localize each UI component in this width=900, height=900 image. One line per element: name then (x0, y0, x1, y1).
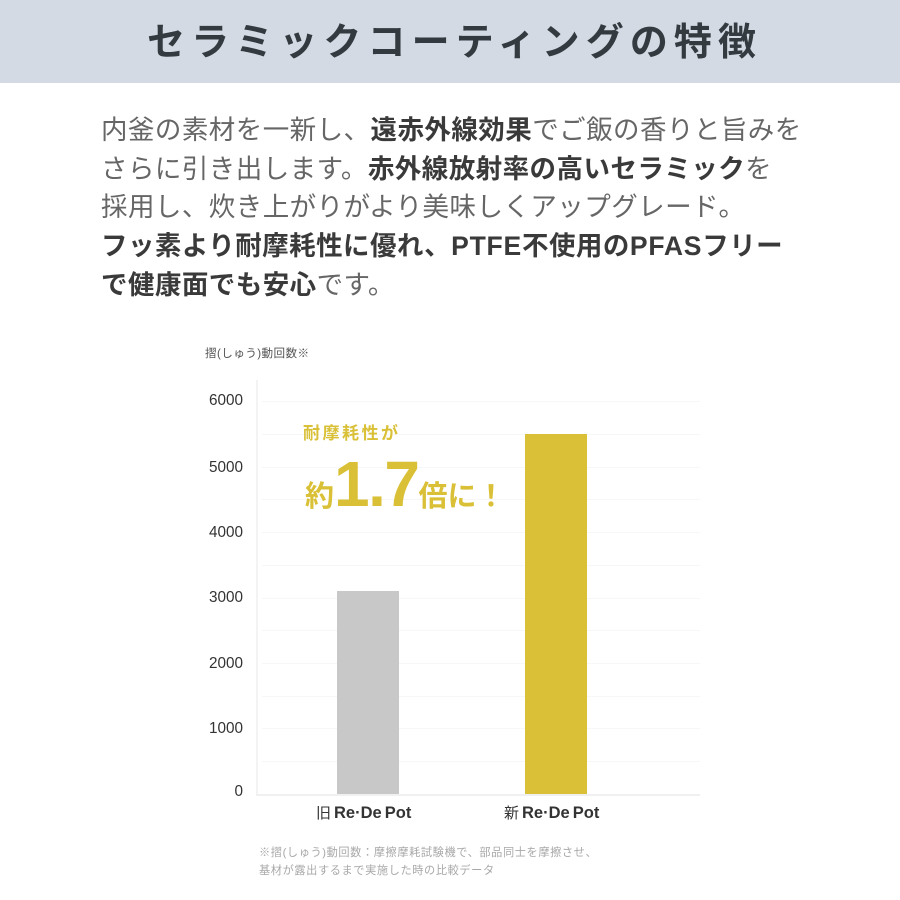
callout: durability about 1.7x (303, 424, 506, 520)
title banner (0, 0, 900, 83)
footnote: ※摺(しゅう)動回数：摩擦摩耗試験機で、部品同士を摩擦させ、 (259, 847, 597, 859)
bar: new Re・De Pot (525, 434, 587, 794)
y axis labels: 2000 (209, 655, 243, 672)
y axis labels: 3000 (209, 589, 243, 606)
footnote: 基材が露出するまで実施した時の比較データ (259, 864, 495, 876)
footnote (259, 846, 597, 876)
callout line 1: 耐摩耗性が (303, 424, 400, 443)
description text block (101, 115, 802, 300)
bar chart (209, 380, 700, 822)
axis title: 摺(しゅう)動回数※ (205, 347, 309, 360)
description text block: さらに引き出します。赤外線放射率の高いセラミックを (101, 154, 772, 184)
description text block: 採用し、炊き上がりがより美味しくアップグレード。 (101, 192, 745, 222)
y axis labels (209, 392, 243, 800)
callout line 2: 約1.7倍に！ (305, 448, 506, 520)
bar: old Re・De Pot (337, 591, 399, 794)
x label: old Re・De Pot: 旧Re·De Pot (316, 804, 411, 822)
title: セラミックコーティングの特徴 (147, 22, 762, 64)
x label: new Re・De Pot: 新Re·De Pot (504, 804, 599, 822)
y axis labels: 6000 (209, 392, 243, 409)
y axis labels: 4000 (209, 524, 243, 541)
y axis labels: 5000 (209, 459, 243, 476)
description text block: フッ素より耐摩耗性に優れ、PTFE不使用のPFASフリー (101, 231, 783, 261)
description text block: 内釜の素材を一新し、遠赤外線効果でご飯の香りと旨みを (101, 115, 802, 145)
description text block: で健康面でも安心です。 (101, 270, 395, 300)
y axis labels: 0 (234, 783, 243, 800)
y axis labels: 1000 (209, 720, 243, 737)
